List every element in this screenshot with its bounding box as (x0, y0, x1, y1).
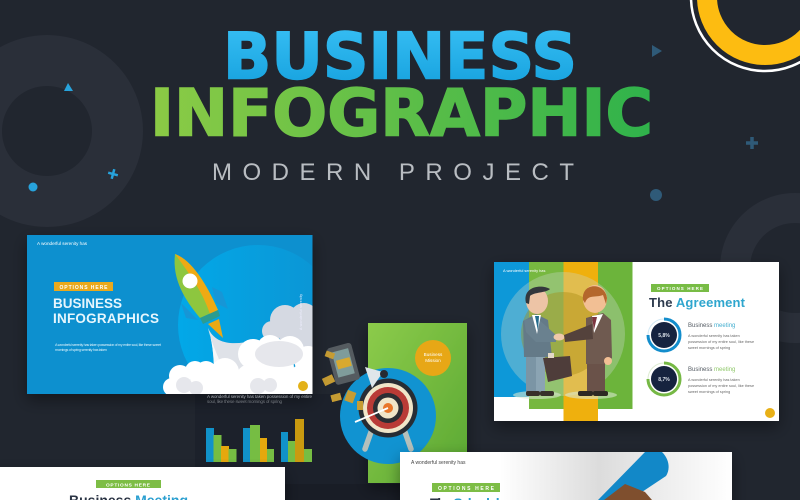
gray cloud (262, 303, 312, 347)
meeting options tag (96, 480, 161, 488)
business mission badge: Mission (425, 358, 441, 363)
rocket slide heading (53, 296, 159, 326)
dark floor band (285, 484, 400, 500)
rocket slide body text: mornings of spring serenity has taken (55, 348, 107, 352)
panel: schedule slide (400, 452, 732, 500)
translucent circles behind figures (501, 272, 625, 399)
rocket slide body text: A wonderful serenity has taken possession of my entire soul, like these sweet (55, 343, 162, 347)
icon: rocket (175, 254, 228, 338)
decorative ring left (0, 35, 143, 227)
agreement slide coin (765, 408, 775, 418)
decorative shapes (28, 45, 758, 201)
metric text: business meeting green: sweet mornings of spring (688, 390, 730, 394)
gold ring top right (691, 0, 800, 71)
rocket slide artwork (163, 245, 312, 394)
rocket slide body text (55, 343, 162, 352)
business mission badge (415, 340, 451, 376)
options tag (54, 282, 113, 291)
panel: rocket slide (27, 235, 312, 394)
caption under rocket slide: soul, like these sweet mornings of spring (207, 399, 282, 404)
panel: agreement slide (494, 262, 779, 421)
options tag: OPTIONS HERE (60, 285, 108, 291)
metric text: business meeting green: Business meeting (688, 367, 735, 373)
metric text: business meeting green: A wonderful serenity has taken (688, 378, 740, 382)
options tag green: OPTIONS HERE (657, 286, 703, 291)
rocket slide side label: A wonderful serenity (299, 294, 303, 330)
metric text: business meeting green (688, 367, 754, 394)
bar chart (206, 419, 312, 462)
illustration: arm and sleeve (598, 452, 669, 500)
cloud shading (176, 341, 303, 395)
white clouds (163, 335, 322, 396)
donut: 8.7% (648, 363, 680, 395)
figure: left businessman (523, 287, 572, 396)
rocket slide heading: BUSINESS (53, 296, 122, 311)
panel: green mission slide (368, 323, 467, 483)
subtitle: MODERN PROJECT (212, 159, 574, 186)
schedule header: A wonderful serenity has (411, 460, 466, 466)
donut: 8.7%: 8,7% (658, 377, 670, 383)
icon: target on blue circle (340, 368, 436, 464)
caption below rocket slide: A wonderful serenity has taken possession of my entire (207, 394, 312, 399)
meeting options tag: OPTIONS HERE (106, 482, 151, 488)
metric text: business meeting blue: sweet mornings of spring (688, 346, 730, 350)
icon: phone, megaphone and envelopes (322, 342, 388, 410)
options tag green (651, 284, 709, 292)
title (150, 20, 653, 152)
figure: right businessman (564, 285, 612, 396)
donut: 5.8% (648, 319, 680, 351)
rocket exhaust (208, 328, 244, 370)
title: INFOGRAPHIC (150, 76, 653, 152)
schedule options tag: OPTIONS HERE (438, 486, 495, 492)
rocket slide coin (298, 381, 308, 391)
rocket slide heading: INFOGRAPHICS (53, 311, 159, 326)
panel: bar chart backdrop (195, 394, 370, 484)
agreement slide header: A wonderful serenity has (503, 268, 545, 273)
metric text: business meeting green: possession of my entire soul, like these (688, 384, 754, 388)
agreement heading: The Agreement (649, 295, 746, 310)
title: BUSINESS (223, 20, 577, 94)
exhaust highlight (208, 328, 219, 364)
metric text: business meeting blue: possession of my entire soul, like these (688, 340, 754, 344)
metric text: business meeting blue (688, 323, 754, 350)
metric text: business meeting blue: Business meeting (688, 323, 735, 329)
panel: business meeting slide (0, 467, 285, 500)
metric text: business meeting blue: A wonderful serenity has taken (688, 334, 740, 338)
rocket slide header: A wonderful serenity has (37, 241, 88, 246)
donut: 5.8%: 5,8% (658, 333, 670, 339)
business mission badge: Business (424, 352, 443, 357)
decorative ring right (720, 193, 800, 343)
schedule options tag (432, 483, 500, 492)
